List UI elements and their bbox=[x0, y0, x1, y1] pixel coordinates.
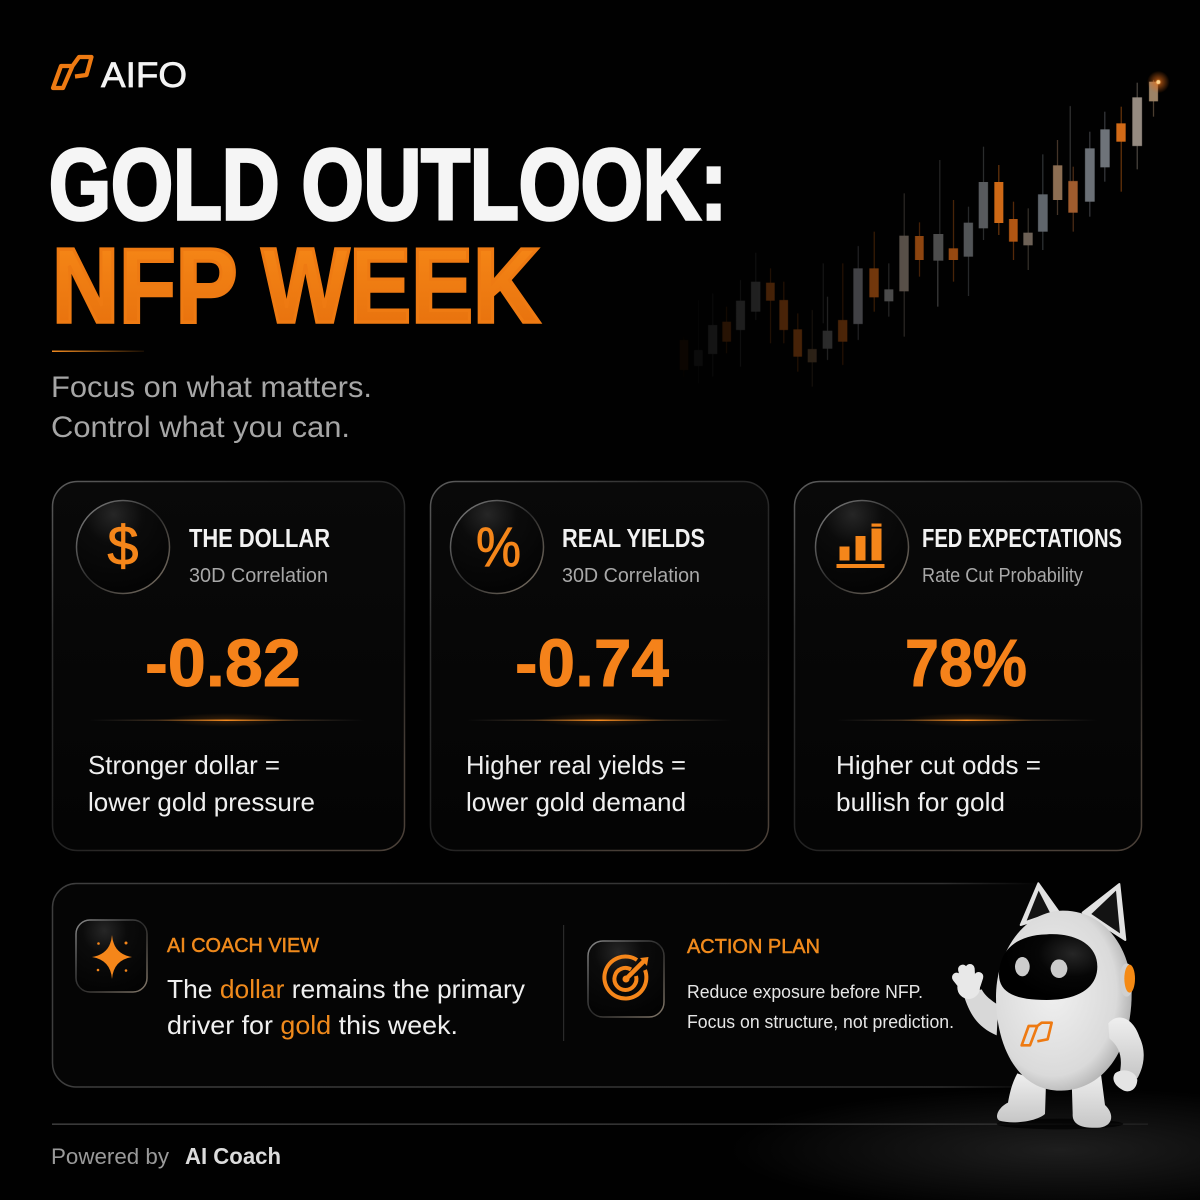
coach view text bbox=[167, 974, 525, 1040]
wordmark: AIFO bbox=[101, 56, 187, 95]
description: Higher real yields = bbox=[466, 750, 686, 780]
panel: coach and action plan bbox=[52, 884, 1040, 1087]
footer: powered by bbox=[51, 1143, 281, 1169]
description: lower gold pressure bbox=[88, 787, 315, 817]
icon: dollar: $ bbox=[107, 514, 139, 577]
subheading: 30D Correlation bbox=[562, 565, 700, 587]
subtitle bbox=[51, 371, 372, 444]
heading: AI coach view: AI COACH VIEW bbox=[167, 935, 319, 957]
description bbox=[466, 750, 686, 817]
subheading: 30D Correlation bbox=[189, 565, 328, 587]
heading: REAL YIELDS bbox=[562, 523, 705, 553]
value: -0.74 bbox=[515, 626, 669, 701]
description bbox=[88, 750, 315, 817]
footer: powered by: AI Coach bbox=[185, 1143, 281, 1169]
title line 1: GOLD OUTLOOK: bbox=[49, 129, 727, 241]
action plan text bbox=[687, 981, 954, 1032]
footer: powered by: Powered by bbox=[51, 1144, 169, 1169]
heading: THE DOLLAR bbox=[189, 523, 330, 553]
description: Stronger dollar = bbox=[88, 750, 280, 780]
value: 78% bbox=[905, 626, 1027, 701]
value: -0.82 bbox=[145, 626, 301, 701]
icon: dollar bbox=[76, 500, 170, 594]
subtitle: Control what you can. bbox=[51, 411, 350, 444]
chest logo bbox=[1022, 1023, 1052, 1045]
icon: target bbox=[588, 941, 664, 1017]
floor glow bbox=[730, 1088, 1200, 1200]
description bbox=[836, 750, 1041, 817]
title line 2: NFP WEEK bbox=[52, 227, 540, 345]
legs and feet bbox=[997, 1073, 1046, 1122]
raised arm bbox=[963, 989, 998, 1035]
panel: real yields bbox=[430, 482, 768, 850]
icon: sparkle bbox=[76, 920, 147, 992]
description: Higher cut odds = bbox=[836, 750, 1041, 780]
subheading: Rate Cut Probability bbox=[922, 565, 1083, 587]
robot mascot bbox=[957, 883, 1144, 1129]
panel: fed expectations bbox=[794, 482, 1142, 850]
ears bbox=[1021, 883, 1059, 925]
subtitle: Focus on what matters. bbox=[51, 371, 372, 404]
eyes bbox=[1015, 957, 1030, 976]
title bbox=[49, 129, 727, 345]
action plan text: Focus on structure, not prediction. bbox=[687, 1011, 954, 1032]
body bbox=[996, 911, 1132, 1091]
icon: percent bbox=[450, 500, 544, 594]
raised hand bbox=[957, 969, 979, 997]
icon: percent: % bbox=[476, 515, 521, 578]
heading: FED EXPECTATIONS bbox=[922, 523, 1122, 553]
logo: AIFO bbox=[53, 56, 187, 95]
side light bbox=[1119, 963, 1134, 997]
description: lower gold demand bbox=[466, 787, 686, 817]
icon: bar chart bbox=[816, 500, 908, 594]
heading: action plan: ACTION PLAN bbox=[687, 936, 820, 958]
lower arm bbox=[1108, 1018, 1144, 1078]
description: bullish for gold bbox=[836, 787, 1005, 817]
icon: AIFO mark bbox=[53, 57, 92, 88]
visor bbox=[999, 934, 1097, 1000]
coach view text: The dollar remains the primary bbox=[167, 974, 525, 1004]
candlestick chart bbox=[680, 71, 1170, 387]
panel: the dollar bbox=[52, 482, 404, 850]
action plan text: Reduce exposure before NFP. bbox=[687, 981, 923, 1002]
lower hand bbox=[1113, 1070, 1137, 1091]
coach view text: driver for gold this week. bbox=[167, 1010, 458, 1040]
